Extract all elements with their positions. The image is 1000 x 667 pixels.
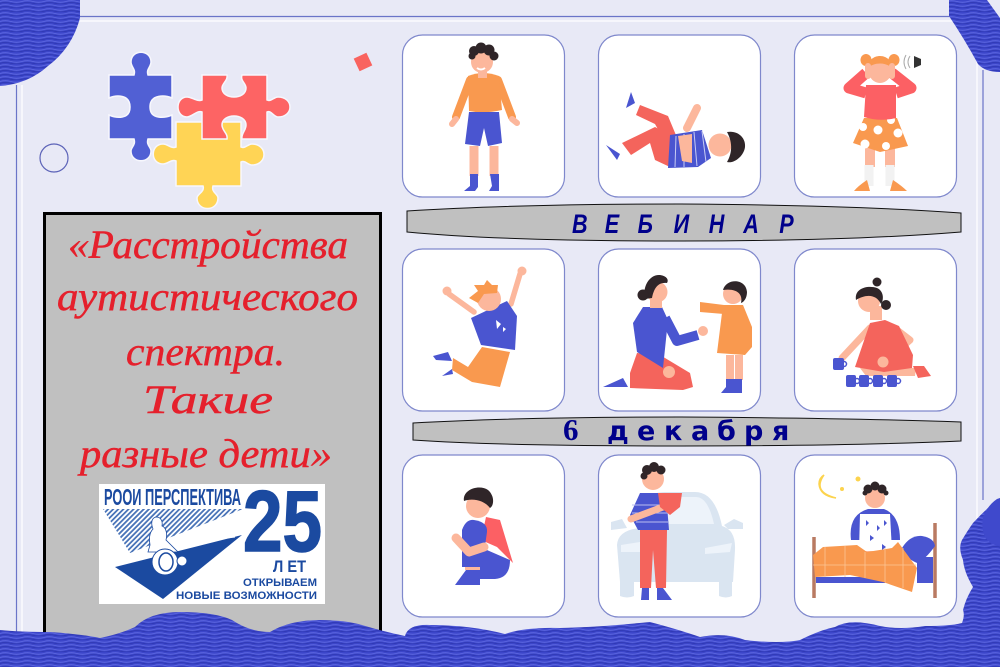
title: Такие — [143, 377, 273, 422]
banner: webinar — [407, 204, 961, 241]
puzzle piece: red — [178, 75, 290, 139]
card: boy jumping — [402, 249, 564, 411]
title — [57, 222, 358, 476]
icon: small red diamond — [354, 53, 372, 71]
puzzle piece: yellow — [153, 122, 264, 208]
decoration: bottom and right blue brush band — [0, 498, 1000, 667]
title: разные дети» — [77, 431, 332, 476]
card: boy reading by car — [598, 455, 760, 617]
title: аутистического — [57, 274, 358, 319]
logo — [99, 474, 325, 604]
card: child falling on floor — [598, 35, 760, 197]
icon: puzzle pieces — [109, 52, 290, 208]
logo: Л ЕТ — [273, 557, 307, 576]
title: «Расстройства — [68, 222, 348, 267]
card: boy standing — [402, 35, 564, 197]
decoration: top-left blue brush blob — [0, 0, 80, 86]
card: boy awake in bed at night — [794, 455, 956, 617]
logo: 25 — [243, 474, 322, 570]
banner text: ВЕБИНАР — [572, 210, 794, 240]
card: girl covering ears — [794, 35, 956, 197]
banner text: декабря — [607, 416, 789, 447]
logo: ОТКРЫВАЕМ — [243, 577, 317, 589]
card: girl arranging cups — [794, 249, 956, 411]
car illustration — [611, 492, 743, 598]
logo: НОВЫЕ ВОЗМОЖНОСТИ — [176, 590, 317, 602]
icon: outlined circle — [40, 144, 68, 172]
decoration: top-right blue brush blob — [949, 0, 1000, 72]
title: спектра. — [126, 329, 285, 374]
panel: title and logo — [44, 214, 380, 654]
banner: date — [413, 412, 961, 447]
banner text: 6 — [563, 412, 578, 447]
card: mother and girl — [598, 249, 760, 411]
logo: РООИ ПЕРСПЕКТИВА — [104, 484, 241, 510]
card: boy hugging knees — [402, 455, 564, 617]
puzzle piece: blue — [109, 52, 172, 161]
